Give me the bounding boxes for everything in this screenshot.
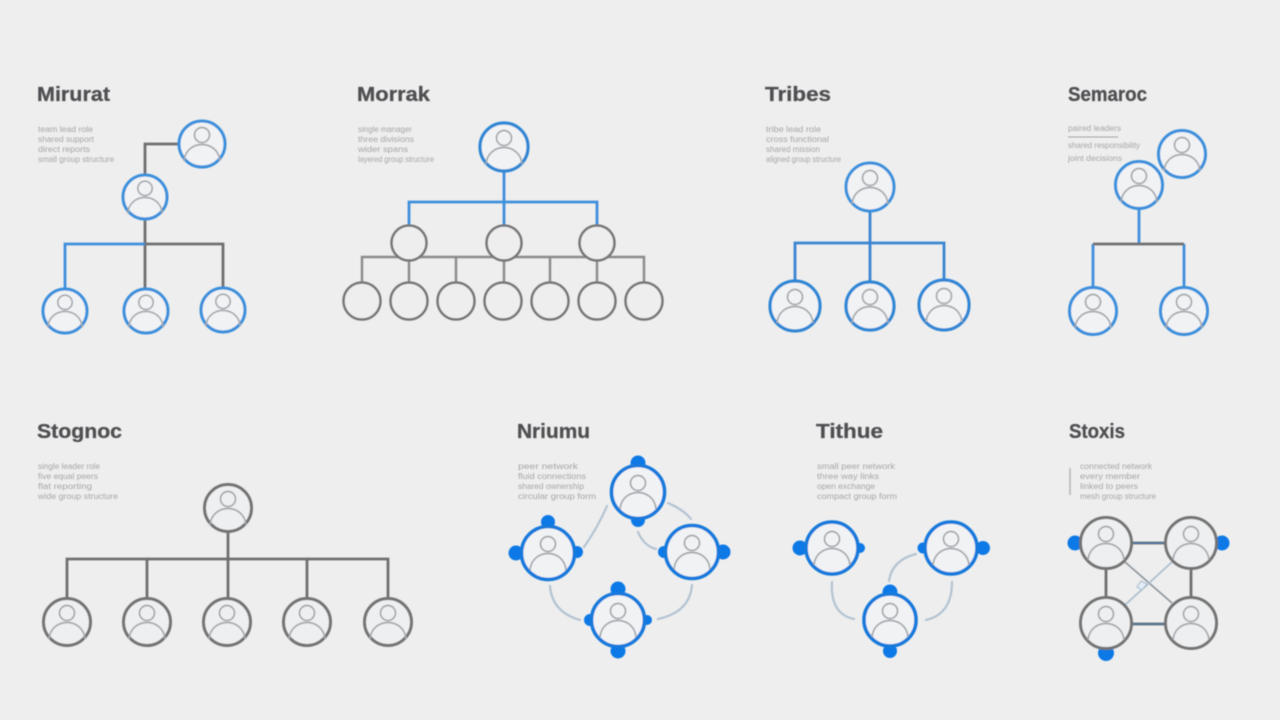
- node: Mirurat top: [179, 121, 225, 167]
- text block: Nriumu description: fluid connections: [518, 472, 586, 481]
- curved connectors: Nriumu ring: [550, 503, 692, 620]
- node: Mirurat member 2: [124, 289, 168, 333]
- panel: Stognoc: [37, 421, 412, 646]
- heading: Semaroc: Semaroc: [1068, 84, 1147, 106]
- text block: Mirurat description: small group structure: [38, 155, 115, 164]
- node: Morrak top: [480, 123, 528, 171]
- text block: Stognoc description: wide group structure: [37, 492, 119, 501]
- text block: Mirurat description: team lead role: [38, 125, 94, 134]
- text block: Mirurat description: direct reports: [38, 145, 90, 154]
- text block: Semaroc description: joint decisions: [1067, 154, 1122, 163]
- panel: Nriumu: [508, 421, 730, 658]
- node: Stognoc member 5: [364, 598, 412, 646]
- text block: Morrak description: single manager: [358, 125, 412, 134]
- panel: Morrak: [344, 84, 662, 320]
- node: Stognoc member 3: [204, 598, 250, 646]
- vertical accent bar: [1069, 468, 1071, 495]
- panel: Tithue: [792, 421, 990, 658]
- node: Mirurat lead: [123, 175, 167, 219]
- node: Tithue right: [918, 522, 990, 574]
- panel: Stoxis: [1068, 421, 1230, 661]
- heading: Nriumu: Nriumu: [517, 421, 590, 443]
- node: Tribes member 1: [770, 281, 820, 331]
- node: Nriumu left: [508, 515, 583, 580]
- panel: Semaroc: [1067, 84, 1208, 334]
- text block: Tribes description: aligned group structure: [766, 155, 842, 164]
- node: Stognoc member 2: [124, 598, 170, 646]
- heading: Stoxis: Stoxis: [1069, 421, 1125, 443]
- node: Semaroc member 1: [1070, 288, 1116, 334]
- node: Tithue bottom: [864, 584, 916, 658]
- text block: Semaroc description: paired leaders: [1068, 124, 1121, 133]
- curved connectors: Tithue triad: [832, 554, 952, 620]
- connectors: Semaroc tree: [1093, 209, 1184, 288]
- heading: Stognoc: Stognoc: [37, 421, 122, 443]
- panel: Tribes: [765, 84, 969, 331]
- node: Stoxis top left: [1080, 518, 1132, 568]
- node: Semaroc member 2: [1160, 288, 1208, 334]
- heading: Morrak: Morrak: [357, 84, 431, 106]
- text block: Semaroc description: shared responsibility: [1068, 141, 1140, 150]
- node: Tribes lead: [846, 163, 894, 211]
- node: Semaroc leader 2: [1158, 130, 1206, 178]
- text block: Tithue description: three way links: [817, 472, 879, 481]
- connectors: Morrak tree: [362, 170, 644, 282]
- node: Mirurat member 1: [43, 289, 87, 333]
- divider rule under first line: [1068, 136, 1118, 138]
- node: Stognoc leader: [204, 484, 252, 532]
- node: Stognoc member 4: [284, 598, 330, 646]
- text block: Stoxis description: mesh group structure: [1080, 492, 1157, 501]
- text block: Nriumu description: shared ownership: [518, 482, 585, 491]
- node: Stognoc member 1: [44, 598, 90, 646]
- text block: Mirurat description: shared support: [38, 135, 95, 144]
- node: Nriumu right: [658, 526, 730, 578]
- heading: Tribes: Tribes: [765, 84, 831, 106]
- text block: Tribes description: tribe lead role: [766, 125, 822, 134]
- text block: Tithue description: small peer network: [817, 462, 896, 471]
- node: Tribes member 2: [846, 282, 894, 330]
- panel: Mirurat: [37, 84, 245, 333]
- node: Mirurat member 3: [201, 288, 245, 332]
- connectors: Stoxis mesh: [1106, 543, 1191, 624]
- accent dots: Stoxis: [1068, 536, 1230, 661]
- heading: Mirurat: Mirurat: [37, 84, 110, 106]
- connectors: Stognoc tree: [67, 532, 388, 598]
- node: Nriumu bottom: [584, 582, 652, 658]
- text block: Tithue description: open exchange: [817, 482, 876, 491]
- node: Stoxis bottom left: [1080, 598, 1132, 648]
- text block: Nriumu description: peer network: [518, 462, 579, 471]
- text block: Tithue description: compact group form: [817, 492, 897, 501]
- node: Nriumu top: [612, 456, 664, 527]
- text block: Stoxis description: linked to peers: [1080, 482, 1138, 491]
- text block: Stognoc description: single leader role: [38, 462, 101, 471]
- text block: Stoxis description: every member: [1080, 472, 1140, 481]
- text block: Stognoc description: five equal peers: [38, 472, 98, 481]
- text block: Morrak description: layered group structure: [358, 155, 435, 164]
- text block: Tribes description: shared mission: [766, 145, 820, 154]
- connectors: Mirurat tree: [65, 144, 223, 311]
- text block: Stognoc description: flat reporting: [38, 482, 92, 491]
- middle row nodes: [392, 226, 614, 260]
- node: Stoxis bottom right: [1166, 598, 1216, 648]
- text block: Morrak description: three divisions: [358, 135, 414, 144]
- text block: Stoxis description: connected network: [1080, 462, 1153, 471]
- node: Stoxis top right: [1166, 518, 1216, 568]
- bottom row nodes: [344, 282, 662, 320]
- text block: Morrak description: wider spans: [357, 145, 408, 154]
- text block: Tribes description: cross functional: [766, 135, 829, 144]
- node: Tithue left: [792, 522, 865, 574]
- connectors: Tribes tree: [795, 210, 944, 282]
- heading: Tithue: Tithue: [816, 421, 883, 443]
- node: Tribes member 3: [919, 280, 969, 330]
- node: Semaroc leader 1: [1116, 162, 1162, 208]
- text block: Nriumu description: circular group form: [518, 492, 596, 501]
